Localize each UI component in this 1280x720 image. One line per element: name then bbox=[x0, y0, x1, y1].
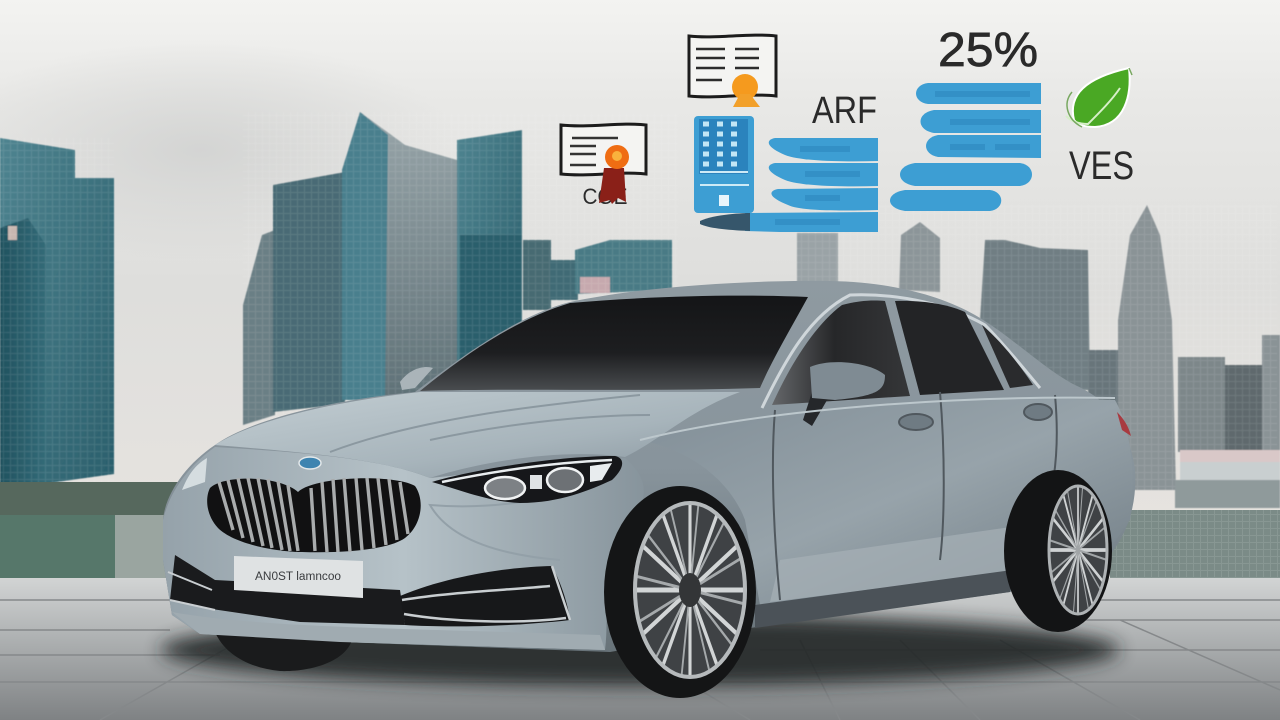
ARF label: ARF bbox=[812, 90, 877, 132]
rear tail light bbox=[1117, 412, 1131, 436]
lower air intake bbox=[170, 555, 405, 625]
skyline: right towers bbox=[797, 205, 1280, 508]
brand badge bbox=[299, 457, 321, 469]
left front tyre bbox=[215, 632, 352, 671]
left headlight sliver bbox=[182, 458, 207, 490]
25% label: 25% bbox=[938, 24, 1038, 77]
skyline: central towers bbox=[243, 112, 678, 425]
roof rail highlight bbox=[762, 295, 1040, 408]
ARF disk stack bbox=[700, 138, 878, 232]
lower door highlight bbox=[770, 525, 1025, 602]
kidney grille bbox=[207, 478, 421, 552]
icon: green leaf bbox=[1066, 68, 1132, 127]
license plate bbox=[234, 556, 363, 598]
icon: small certificate with COE label bbox=[561, 124, 646, 209]
ground paving bbox=[0, 578, 1280, 720]
left mirror bbox=[400, 367, 433, 390]
fog lamp housing bbox=[168, 566, 570, 626]
door seams and handles bbox=[640, 392, 1115, 600]
car body bbox=[163, 281, 1135, 652]
license plate: AN0ST lamncoo bbox=[255, 571, 341, 583]
front bumper bbox=[163, 447, 644, 650]
front wheel bbox=[604, 486, 756, 698]
front lip bbox=[172, 612, 605, 650]
skyline: left towers bbox=[0, 138, 114, 490]
rear wheel bbox=[1004, 470, 1112, 632]
side windows bbox=[772, 300, 1033, 405]
VES label: VES bbox=[1069, 144, 1134, 188]
car shadow bbox=[160, 614, 1120, 686]
side doors panel bbox=[640, 399, 1133, 605]
sky background bbox=[0, 0, 1280, 520]
side sill bbox=[755, 570, 1012, 628]
water and shore bbox=[0, 482, 1280, 582]
car bbox=[163, 281, 1135, 698]
icon: blue phone keypad bbox=[694, 116, 754, 213]
hood bbox=[215, 392, 740, 478]
windshield bbox=[420, 296, 808, 391]
side mirror bbox=[803, 362, 885, 426]
icon: small certificate with COE label: COE bbox=[582, 184, 628, 209]
headlight bbox=[432, 456, 622, 503]
25% disk stack bbox=[890, 83, 1041, 211]
icon: large certificate bbox=[689, 35, 776, 107]
